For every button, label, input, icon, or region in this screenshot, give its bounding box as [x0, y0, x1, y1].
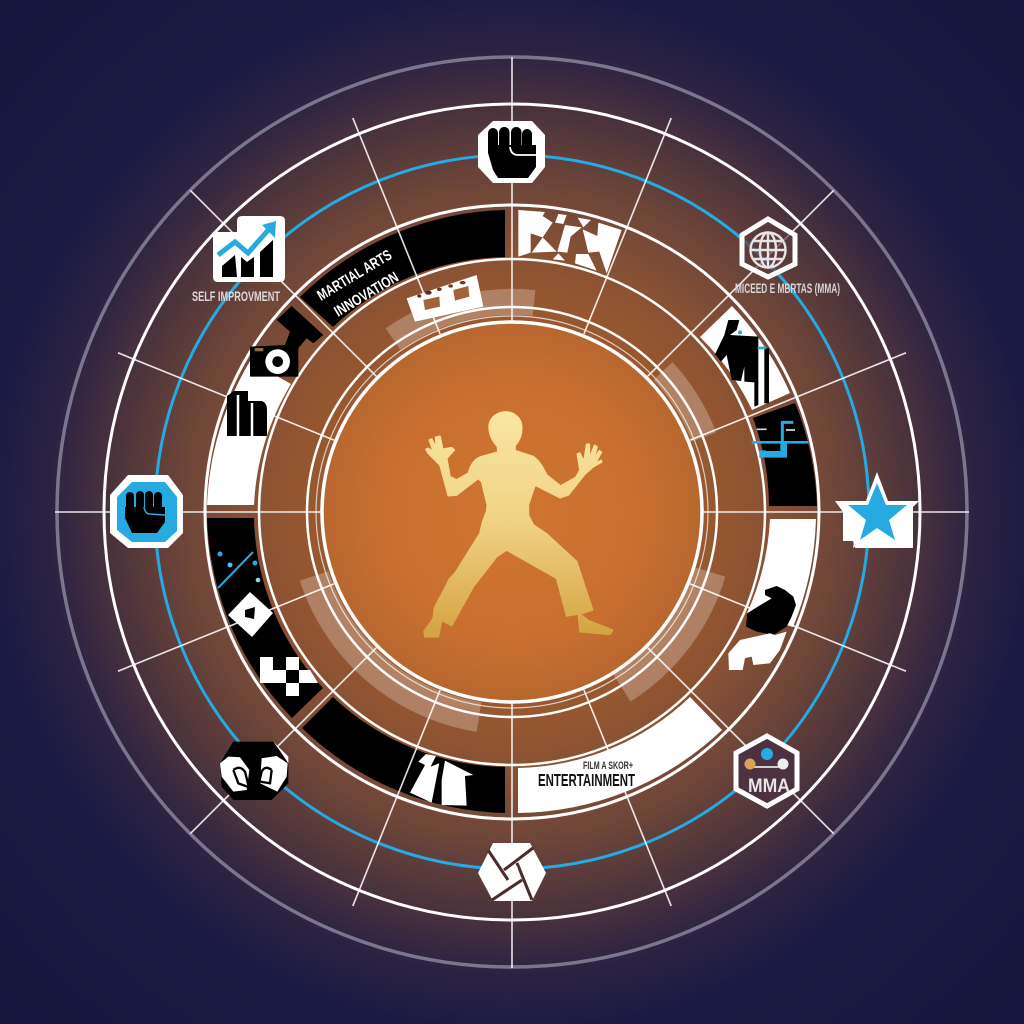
icon: self improvement chart — [213, 216, 285, 282]
icon: star badge — [835, 472, 919, 548]
segment: right white — [747, 519, 816, 627]
icon: bars — [227, 391, 267, 436]
segment: right black — [753, 403, 817, 506]
label: martial arts innovation — [314, 247, 402, 320]
radial spokes — [55, 57, 969, 968]
icon: top fist octagon — [478, 121, 545, 183]
label: film and entertainment: ENTERTAINMENT — [538, 770, 635, 790]
concentric rings — [57, 57, 967, 967]
segment: entertainment — [518, 697, 722, 813]
icon: shirt — [410, 754, 473, 806]
label: mixed martial arts: MICEED E MBRTAS (MMA) — [735, 280, 840, 296]
icon: MMA hexagon — [736, 736, 797, 806]
icon: camera — [250, 306, 323, 377]
icon: ticket strip — [407, 275, 483, 322]
segment: left upper white — [207, 361, 291, 505]
label: martial arts innovation: MARTIAL ARTS — [314, 247, 395, 304]
translucent arcs — [314, 302, 710, 717]
segment: top triangle pattern — [518, 210, 622, 273]
icon: film aperture hexagon — [478, 843, 546, 901]
label: self improvement: SELF IMPROVMENT — [192, 288, 280, 304]
label: film and entertainment: FILM A SKOR+ — [583, 760, 633, 772]
icon: black blob and white shape — [728, 586, 796, 670]
segment: bottom left black — [302, 697, 505, 813]
segment: left lower black — [207, 518, 323, 718]
icon: gloves octagon — [220, 742, 288, 800]
segment: upper right figure — [700, 306, 790, 410]
segment: martial arts innovation — [300, 210, 505, 327]
label: martial arts innovation: INNOVATION — [331, 269, 402, 320]
icon: diamond — [228, 592, 273, 637]
icon: checker pattern — [260, 657, 318, 696]
center disc — [322, 322, 702, 702]
icon: left fist octagon — [110, 475, 183, 548]
label: film and entertainment — [538, 760, 635, 790]
icon: MMA hexagon: MMA — [748, 776, 790, 797]
icon: circuit lines — [752, 422, 808, 454]
icon: constellation — [218, 552, 260, 588]
icon: globe hexagon — [742, 219, 795, 277]
icon: black figure on white — [715, 320, 769, 407]
central figure silhouette — [424, 412, 613, 637]
